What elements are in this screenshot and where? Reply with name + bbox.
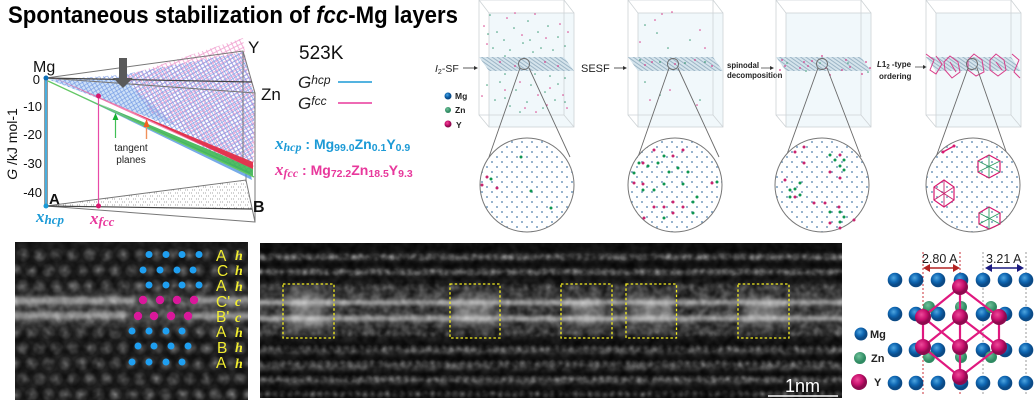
zoom cone (936, 58, 1008, 157)
stacking sequence letters: A (216, 324, 227, 341)
box (479, 0, 574, 127)
x hcp composition: Y (386, 136, 396, 152)
x hcp composition: 99.0 (334, 142, 355, 154)
h and c labels: h (235, 326, 243, 341)
x fcc composition: 72.2 (331, 168, 351, 180)
panel: SESF stage (628, 0, 723, 232)
L12 hexagon top right (978, 155, 1000, 178)
image background (5, 242, 258, 400)
x fcc composition: Zn (351, 162, 368, 178)
zoom circle (926, 138, 1020, 232)
x hcp label: hcp (44, 212, 64, 227)
legend: atom types (444, 91, 467, 130)
legend: atom types: Y (456, 120, 462, 130)
h and c labels: h (235, 249, 243, 264)
zoom cone (489, 58, 570, 157)
2.80 A dimension (922, 252, 960, 272)
image noise (15, 242, 248, 400)
dimension lines (923, 252, 1026, 395)
x fcc composition: 9.3 (398, 168, 413, 180)
x fcc composition: x (274, 160, 284, 179)
solute atoms (639, 24, 706, 101)
tangent planes (46, 76, 254, 180)
L12-type ordering label: L1 (877, 60, 886, 69)
blue hcp mesh surface (50, 52, 255, 178)
corner labels: A (49, 191, 60, 208)
pink fcc drop line (98, 95, 100, 206)
x fcc label: x (90, 209, 98, 228)
atom legend (851, 328, 886, 390)
box (776, 0, 871, 127)
axis tick labels: -10 (23, 99, 42, 114)
stacking fault band (776, 57, 871, 71)
stacking sequence letters: C (217, 263, 228, 280)
corner labels (33, 38, 281, 216)
corner labels: Mg (33, 59, 55, 76)
axis tick labels: 0 (33, 72, 40, 87)
spinodal decomposition label: decomposition (727, 71, 783, 80)
Y bonds (923, 287, 999, 377)
panel: Gibbs energy surface plot (4, 38, 281, 229)
solute clusters (779, 55, 871, 76)
spinodal decomposition label (727, 61, 783, 80)
L12 hexagon left (934, 180, 954, 207)
legend: G hcp and G fcc: G (298, 73, 311, 92)
axis tick labels: -40 (23, 185, 42, 200)
stacking sequence letters: A (216, 355, 227, 372)
zoom cone (638, 58, 719, 157)
L12-type ordering label: -type (890, 60, 912, 69)
pink fcc mesh surface (125, 38, 255, 168)
stacking sequence letters (216, 248, 230, 372)
L12 hexagon bottom right (979, 207, 1000, 229)
zoom circle (775, 138, 869, 232)
stacking fault band (628, 57, 723, 71)
atom legend: Zn (871, 353, 885, 365)
SESF label (581, 63, 627, 75)
stacking sequence letters: C' (216, 294, 230, 311)
legend: G hcp and G fcc: hcp (311, 73, 331, 87)
floor mesh (48, 180, 255, 222)
solute atoms (486, 14, 566, 113)
dense mesh near Mg corner (48, 79, 175, 125)
bright clusters (290, 292, 781, 330)
legend: atom types: Zn (455, 105, 465, 115)
h and c labels: h (235, 357, 243, 372)
panel: atomic-resolution STEM image (250, 243, 852, 398)
I2-SF label: -SF (442, 63, 459, 75)
legend: G hcp and G fcc: G (298, 94, 311, 113)
corner labels: B (253, 199, 265, 216)
blue hcp atoms (128, 251, 202, 366)
h and c labels: h (235, 341, 243, 356)
x fcc composition: Y (389, 162, 399, 178)
stacking sequence letters: B' (216, 309, 229, 326)
composition points (44, 76, 101, 208)
x fcc composition: 18.5 (368, 168, 389, 180)
Zn atoms (923, 301, 997, 363)
bright fault band (250, 285, 852, 335)
panel: L12 ordering stage (926, 0, 1021, 232)
panel: crystal structure (851, 252, 1033, 395)
L12-type ordering label (877, 60, 927, 81)
legend: atom types: Mg (455, 91, 467, 101)
stacking sequence letters: A (216, 248, 227, 265)
legend: G hcp and G fcc (298, 73, 372, 113)
x fcc label: fcc (98, 214, 115, 229)
image noise (260, 243, 842, 398)
axis tick labels: -30 (23, 156, 42, 171)
pink pair (942, 144, 956, 154)
x hcp composition: x (274, 134, 284, 153)
orange arrow (144, 119, 150, 139)
title: Spontaneous stabilization of fcc-Mg layers (8, 2, 458, 29)
tangent planes label: tangent (114, 143, 148, 154)
tangent planes label: planes (116, 155, 146, 166)
SESF label: SESF (581, 63, 610, 75)
3.21 A dimension (985, 252, 1024, 272)
L12-type ordering label: 2 (886, 64, 890, 70)
y axis title: G /kJ mol-1 (4, 108, 20, 180)
panel: I2-SF stage (479, 0, 574, 232)
2.80 A dimension: 2.80 A (922, 252, 958, 266)
x hcp composition: 0.9 (396, 142, 410, 154)
scale bar (768, 376, 838, 396)
legend: G hcp and G fcc: fcc (311, 94, 327, 108)
stacking fault band (926, 57, 1021, 71)
bright fault band (5, 292, 258, 326)
L12-type ordering label: ordering (879, 72, 912, 81)
h and c labels: c (235, 311, 242, 326)
x hcp composition: : Mg (302, 136, 334, 152)
3.21 A dimension: 3.21 A (986, 252, 1022, 266)
zoom cone (786, 58, 861, 157)
h and c labels: c (235, 295, 242, 310)
image background (250, 243, 852, 398)
x fcc composition: : Mg (298, 162, 331, 178)
x hcp composition: 0.1 (372, 142, 386, 154)
magenta fcc atoms (134, 296, 198, 320)
ordered clusters (926, 54, 1020, 78)
corner labels: Y (248, 38, 259, 57)
grey down arrow (113, 58, 133, 88)
stacking sequence letters: A (216, 278, 227, 295)
bright fault streaks (250, 300, 852, 321)
axis tick labels: -20 (23, 127, 42, 142)
spinodal decomposition label: spinodal (727, 61, 759, 70)
Y atoms (915, 279, 1007, 385)
I2-SF label (435, 63, 478, 76)
box (628, 0, 723, 127)
I2-SF label: 2 (438, 69, 442, 76)
x hcp label: x (36, 207, 44, 226)
panel: HAADF image with stacking sequence (5, 242, 258, 400)
corner labels: Zn (261, 85, 281, 104)
temperature label: 523K (299, 43, 344, 64)
Mg atoms (888, 273, 1033, 390)
scale bar: 1nm (785, 376, 820, 396)
panel: spinodal decomposition stage (775, 0, 871, 232)
bright fault streaks (10, 297, 255, 319)
green arrow (112, 113, 118, 138)
zoom circle (628, 138, 722, 232)
atom legend: Mg (870, 329, 886, 341)
yellow dashed boxes (283, 284, 789, 338)
atom legend: Y (874, 377, 882, 389)
x fcc composition: fcc (284, 166, 299, 180)
stacking fault band (479, 57, 574, 71)
x hcp composition: Zn (355, 136, 372, 152)
axis tick labels (23, 72, 42, 200)
h and c labels (235, 249, 243, 372)
I2-SF label: I (435, 63, 438, 75)
blue hcp axis line (45, 78, 47, 206)
h and c labels: h (235, 280, 243, 295)
box (926, 0, 1021, 127)
plot box outline (44, 51, 255, 222)
h and c labels: h (235, 264, 243, 279)
x hcp composition: hcp (284, 140, 302, 154)
stacking sequence letters: B (217, 340, 227, 357)
zoom circle (480, 138, 574, 232)
